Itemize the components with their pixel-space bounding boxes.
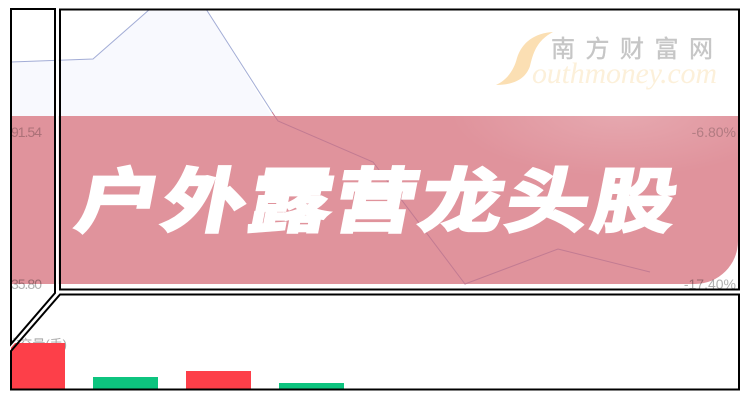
bar: red 1	[11, 343, 65, 389]
line chart: price trend	[11, 9, 650, 284]
logo swoosh	[496, 32, 553, 85]
red title band	[11, 116, 738, 284]
logo chinese name: 南方财富网	[551, 36, 724, 63]
bar: green 1	[93, 377, 158, 389]
title: 外	[156, 163, 254, 241]
volume label: 成交量(手)	[6, 337, 67, 352]
axis label: left bottom: 35.80	[11, 276, 42, 292]
watermark logo: southmoney	[496, 32, 724, 90]
axis label: right bottom: -17.40%	[684, 276, 736, 292]
bar: red 2	[186, 371, 251, 389]
volume bars	[11, 343, 344, 389]
title: 营	[327, 163, 425, 241]
title: 股	[586, 163, 684, 241]
frame: left panel	[11, 9, 55, 344]
title	[70, 163, 684, 241]
frame: bottom panel	[11, 294, 739, 390]
frame: main panel	[60, 10, 739, 290]
axis label: right top: -6.80%	[692, 124, 736, 140]
title: 露	[242, 163, 340, 241]
chart area fill	[11, 9, 272, 116]
axis label: left top: 91.54	[11, 124, 42, 140]
title: 头	[500, 163, 597, 241]
title: 户	[70, 163, 168, 241]
bar: green 2	[279, 383, 344, 389]
logo latin name: outhmoney.com	[532, 57, 717, 90]
title: 龙	[414, 163, 511, 241]
